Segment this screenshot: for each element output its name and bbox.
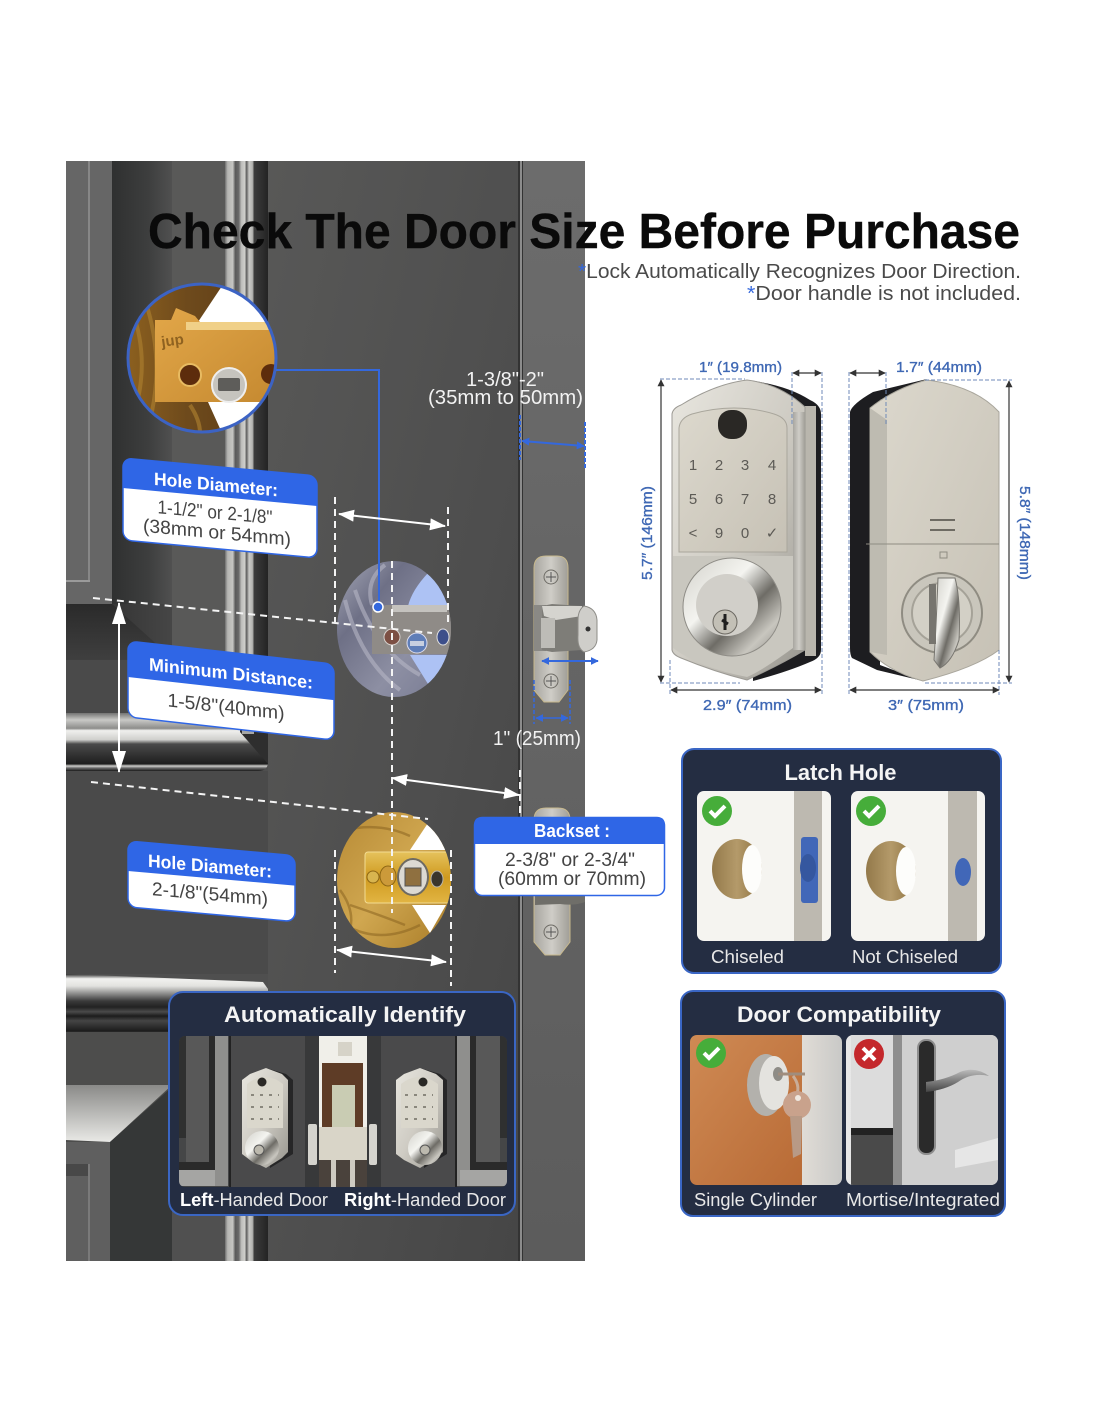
- arrow: minimum distance: [118, 603, 120, 772]
- keypad digits: 1: [689, 457, 697, 474]
- icon: mini left-handed lock: [242, 1068, 293, 1168]
- icon: upper latch plate and bolt on door edge: [534, 556, 597, 702]
- callout: minimum distance: 1-5/8"(40mm): [168, 690, 285, 725]
- photo: single cylinder: [690, 1035, 842, 1185]
- photo: left and right handed doors: [179, 1036, 507, 1187]
- arrow: lower hole diameter: [337, 950, 446, 962]
- icon: magnified latch circle: jup: [159, 331, 185, 351]
- callout: backset: (60mm or 70mm): [498, 869, 646, 890]
- keypad digits: [689, 457, 778, 542]
- guide lines: white dashed measurement lines: [91, 497, 520, 986]
- callout: hole diameter 2-1/8: Hole Diameter:: [148, 851, 272, 882]
- dimension labels: [639, 359, 1033, 714]
- callout: backset: [474, 817, 665, 896]
- keypad digits: ✓: [766, 525, 778, 542]
- callout: minimum distance: [128, 641, 334, 740]
- keypad digits: 8: [768, 491, 776, 508]
- callout: hole diameter 1-1/2 or 2-1/8: (38mm or 54mm): [143, 516, 291, 551]
- panel: latch hole: [682, 749, 1001, 973]
- labels: door types: [694, 1190, 1000, 1210]
- note: door direction and handle: *Door handle is not included.: [747, 283, 1021, 305]
- arrow: latch plate width: [534, 680, 570, 724]
- heading: latch hole: Latch Hole: [784, 760, 896, 785]
- keypad digits: 0: [741, 525, 749, 542]
- panel: door compatibility: [681, 991, 1005, 1216]
- icon: green check chiseled: [702, 796, 732, 826]
- icon: front keypad lock: [672, 380, 821, 681]
- keypad digits: 2: [715, 457, 723, 474]
- dimension lines: lock measurements: [660, 372, 1012, 695]
- icon: green check not chiseled: [856, 796, 886, 826]
- icon: rear thumbturn lock: [850, 379, 999, 681]
- callout: door thickness: [428, 369, 583, 409]
- labels: door handedness: [180, 1190, 506, 1210]
- label: latch plate width: 1" (25mm): [493, 728, 581, 750]
- icon: magnified latch circle: [127, 283, 281, 433]
- keypad digits: <: [689, 525, 698, 542]
- labels: door types: Mortise/Integrated: [846, 1190, 1000, 1210]
- icon: lower latch plate on door edge: [534, 808, 585, 955]
- dimension labels: 1.7″ (44mm): [896, 359, 982, 376]
- connector: magnifier to hole: [276, 370, 383, 612]
- dimension labels: 3″ (75mm): [888, 697, 964, 714]
- callout: backset: Backset :: [534, 821, 610, 841]
- callout: backset: 2-3/8" or 2-3/4": [505, 850, 635, 871]
- photo: chiseled latch hole: [697, 791, 831, 941]
- labels: latch types: [711, 947, 958, 967]
- keypad digits: 4: [768, 457, 776, 474]
- arrow: latch depth: [542, 660, 598, 662]
- arrow: upper hole diameter: [339, 514, 445, 526]
- photo: not chiseled latch hole: [851, 791, 985, 941]
- callout: hole diameter 2-1/8: [128, 841, 295, 922]
- heading: door compatibility: Door Compatibility: [737, 1002, 942, 1027]
- callout: hole diameter 1-1/2 or 2-1/8: 1-1/2" or 2-1/8": [157, 497, 272, 529]
- callout: door thickness: 1-3/8"-2": [466, 369, 544, 391]
- callout: hole diameter 1-1/2 or 2-1/8: Hole Diameter:: [154, 469, 278, 500]
- callout: minimum distance: Minimum Distance:: [149, 654, 313, 693]
- labels: door handedness: Left-Handed Door: [180, 1190, 328, 1210]
- keypad digits: 6: [715, 491, 723, 508]
- keypad digits: 9: [715, 525, 723, 542]
- note: door direction and handle: *Lock Automatically Recognizes Door Direction.: [578, 261, 1021, 283]
- labels: door types: Single Cylinder: [694, 1190, 817, 1210]
- icon: translucent door hole with latch: [337, 561, 451, 697]
- callout: hole diameter 2-1/8: 2-1/8"(54mm): [152, 879, 268, 910]
- icon: green check single cylinder: [696, 1038, 726, 1068]
- labels: latch types: Not Chiseled: [852, 947, 958, 967]
- icon: mini right-handed lock: [396, 1068, 447, 1168]
- heading: automatically identify: Automatically Identify: [224, 1002, 467, 1027]
- labels: door handedness: Right-Handed Door: [344, 1190, 506, 1210]
- callout: door thickness: (35mm to 50mm): [428, 387, 583, 409]
- panel: automatically identify: [169, 992, 515, 1215]
- dimension labels: 2.9″ (74mm): [703, 697, 792, 714]
- dimension labels: 5.8″ (148mm): [1016, 486, 1033, 580]
- title: Check The Door Size Before Purchase: [148, 205, 1020, 259]
- panel: door photo background: [66, 161, 585, 1261]
- labels: latch types: Chiseled: [711, 947, 784, 967]
- photo: mortise integrated: [846, 1035, 998, 1185]
- icon: red cross mortise: [854, 1039, 884, 1069]
- keypad digits: 3: [741, 457, 749, 474]
- keypad digits: 7: [741, 491, 749, 508]
- keypad digits: 5: [689, 491, 697, 508]
- note: door direction and handle: [578, 261, 1021, 305]
- arrow: backset: [392, 778, 519, 795]
- arrows: lock dimensions: [661, 373, 1009, 690]
- callout: hole diameter 1-1/2 or 2-1/8: [123, 458, 317, 558]
- icon: gold door hole with latch: [337, 812, 455, 948]
- dimension labels: 5.7″ (146mm): [639, 486, 656, 580]
- arrow: door thickness dimension: [520, 415, 585, 468]
- dimension labels: 1″ (19.8mm): [699, 359, 782, 376]
